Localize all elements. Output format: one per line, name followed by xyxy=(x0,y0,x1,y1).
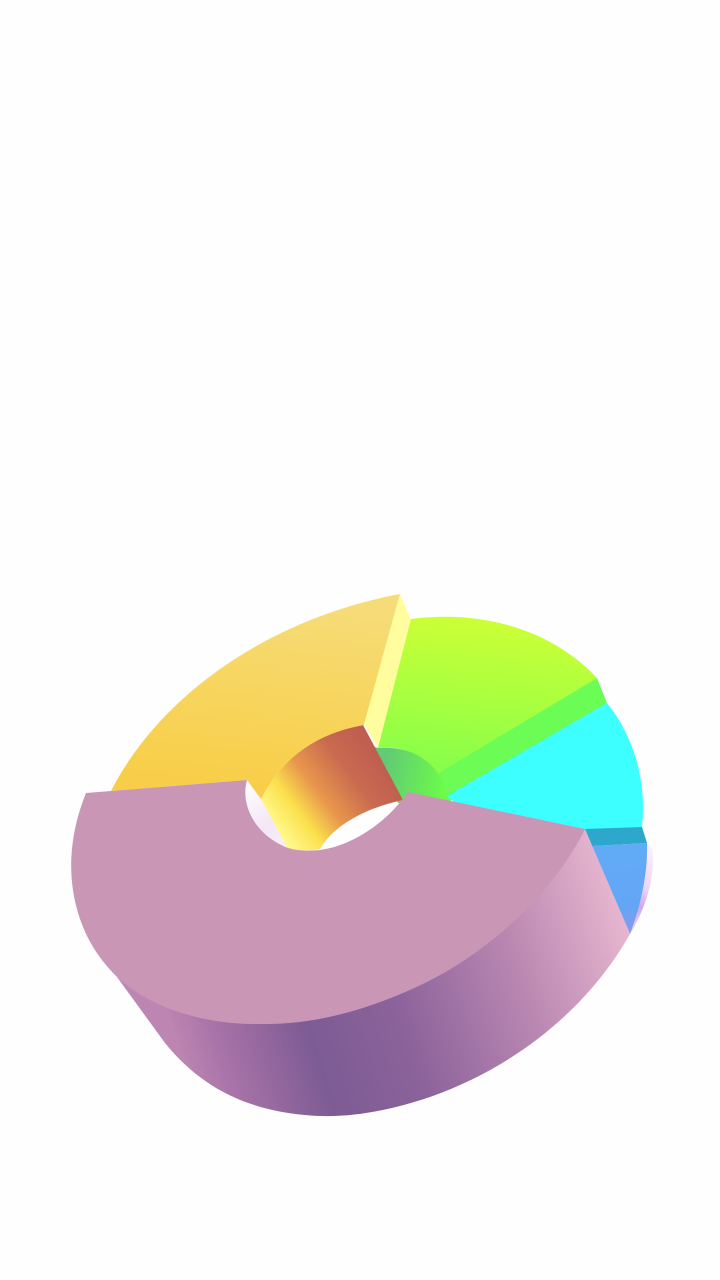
inner wall: green xyxy=(370,745,452,806)
yellow top face xyxy=(111,594,400,799)
blue top face xyxy=(592,843,647,934)
slice: pink xyxy=(71,780,630,1116)
blue cut face xyxy=(585,827,647,846)
pink side face xyxy=(117,829,630,1116)
slice: blue xyxy=(585,827,653,934)
slice: green xyxy=(378,617,607,797)
green top face xyxy=(378,617,597,775)
slice: yellow xyxy=(111,594,411,799)
blue far rim, lilac xyxy=(630,843,653,934)
inner wall: yellow to red xyxy=(261,725,403,850)
green cut face xyxy=(439,678,607,797)
pink top face xyxy=(71,780,585,1024)
yellow cut face xyxy=(364,594,411,748)
inner hole lilac wall xyxy=(245,780,296,848)
slice: cyan xyxy=(447,703,643,835)
